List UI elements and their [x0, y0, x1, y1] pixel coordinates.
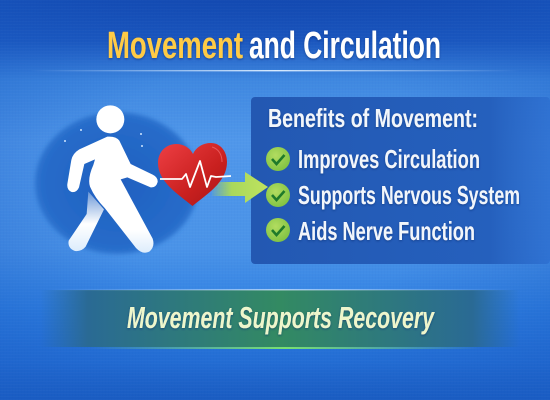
icon: walking person: [67, 105, 158, 253]
title: and Circulation: [249, 25, 441, 67]
panel: benefits: [251, 97, 550, 264]
heading: Benefits of Movement:: [268, 103, 478, 133]
title: [107, 25, 441, 67]
item: aids nerve function: Aids Nerve Function: [298, 216, 475, 246]
illustration: walking figure with glow: [35, 105, 199, 254]
item: improves circulation: [266, 144, 480, 174]
title: Movement: [107, 25, 243, 67]
banner: movement supports recovery: [40, 289, 520, 349]
item: improves circulation: Improves Circulation: [298, 144, 480, 174]
item: aids nerve function: [266, 216, 475, 246]
glow circle: [35, 112, 199, 254]
arrow: [212, 172, 268, 203]
icon: heart with pulse: [158, 143, 231, 206]
